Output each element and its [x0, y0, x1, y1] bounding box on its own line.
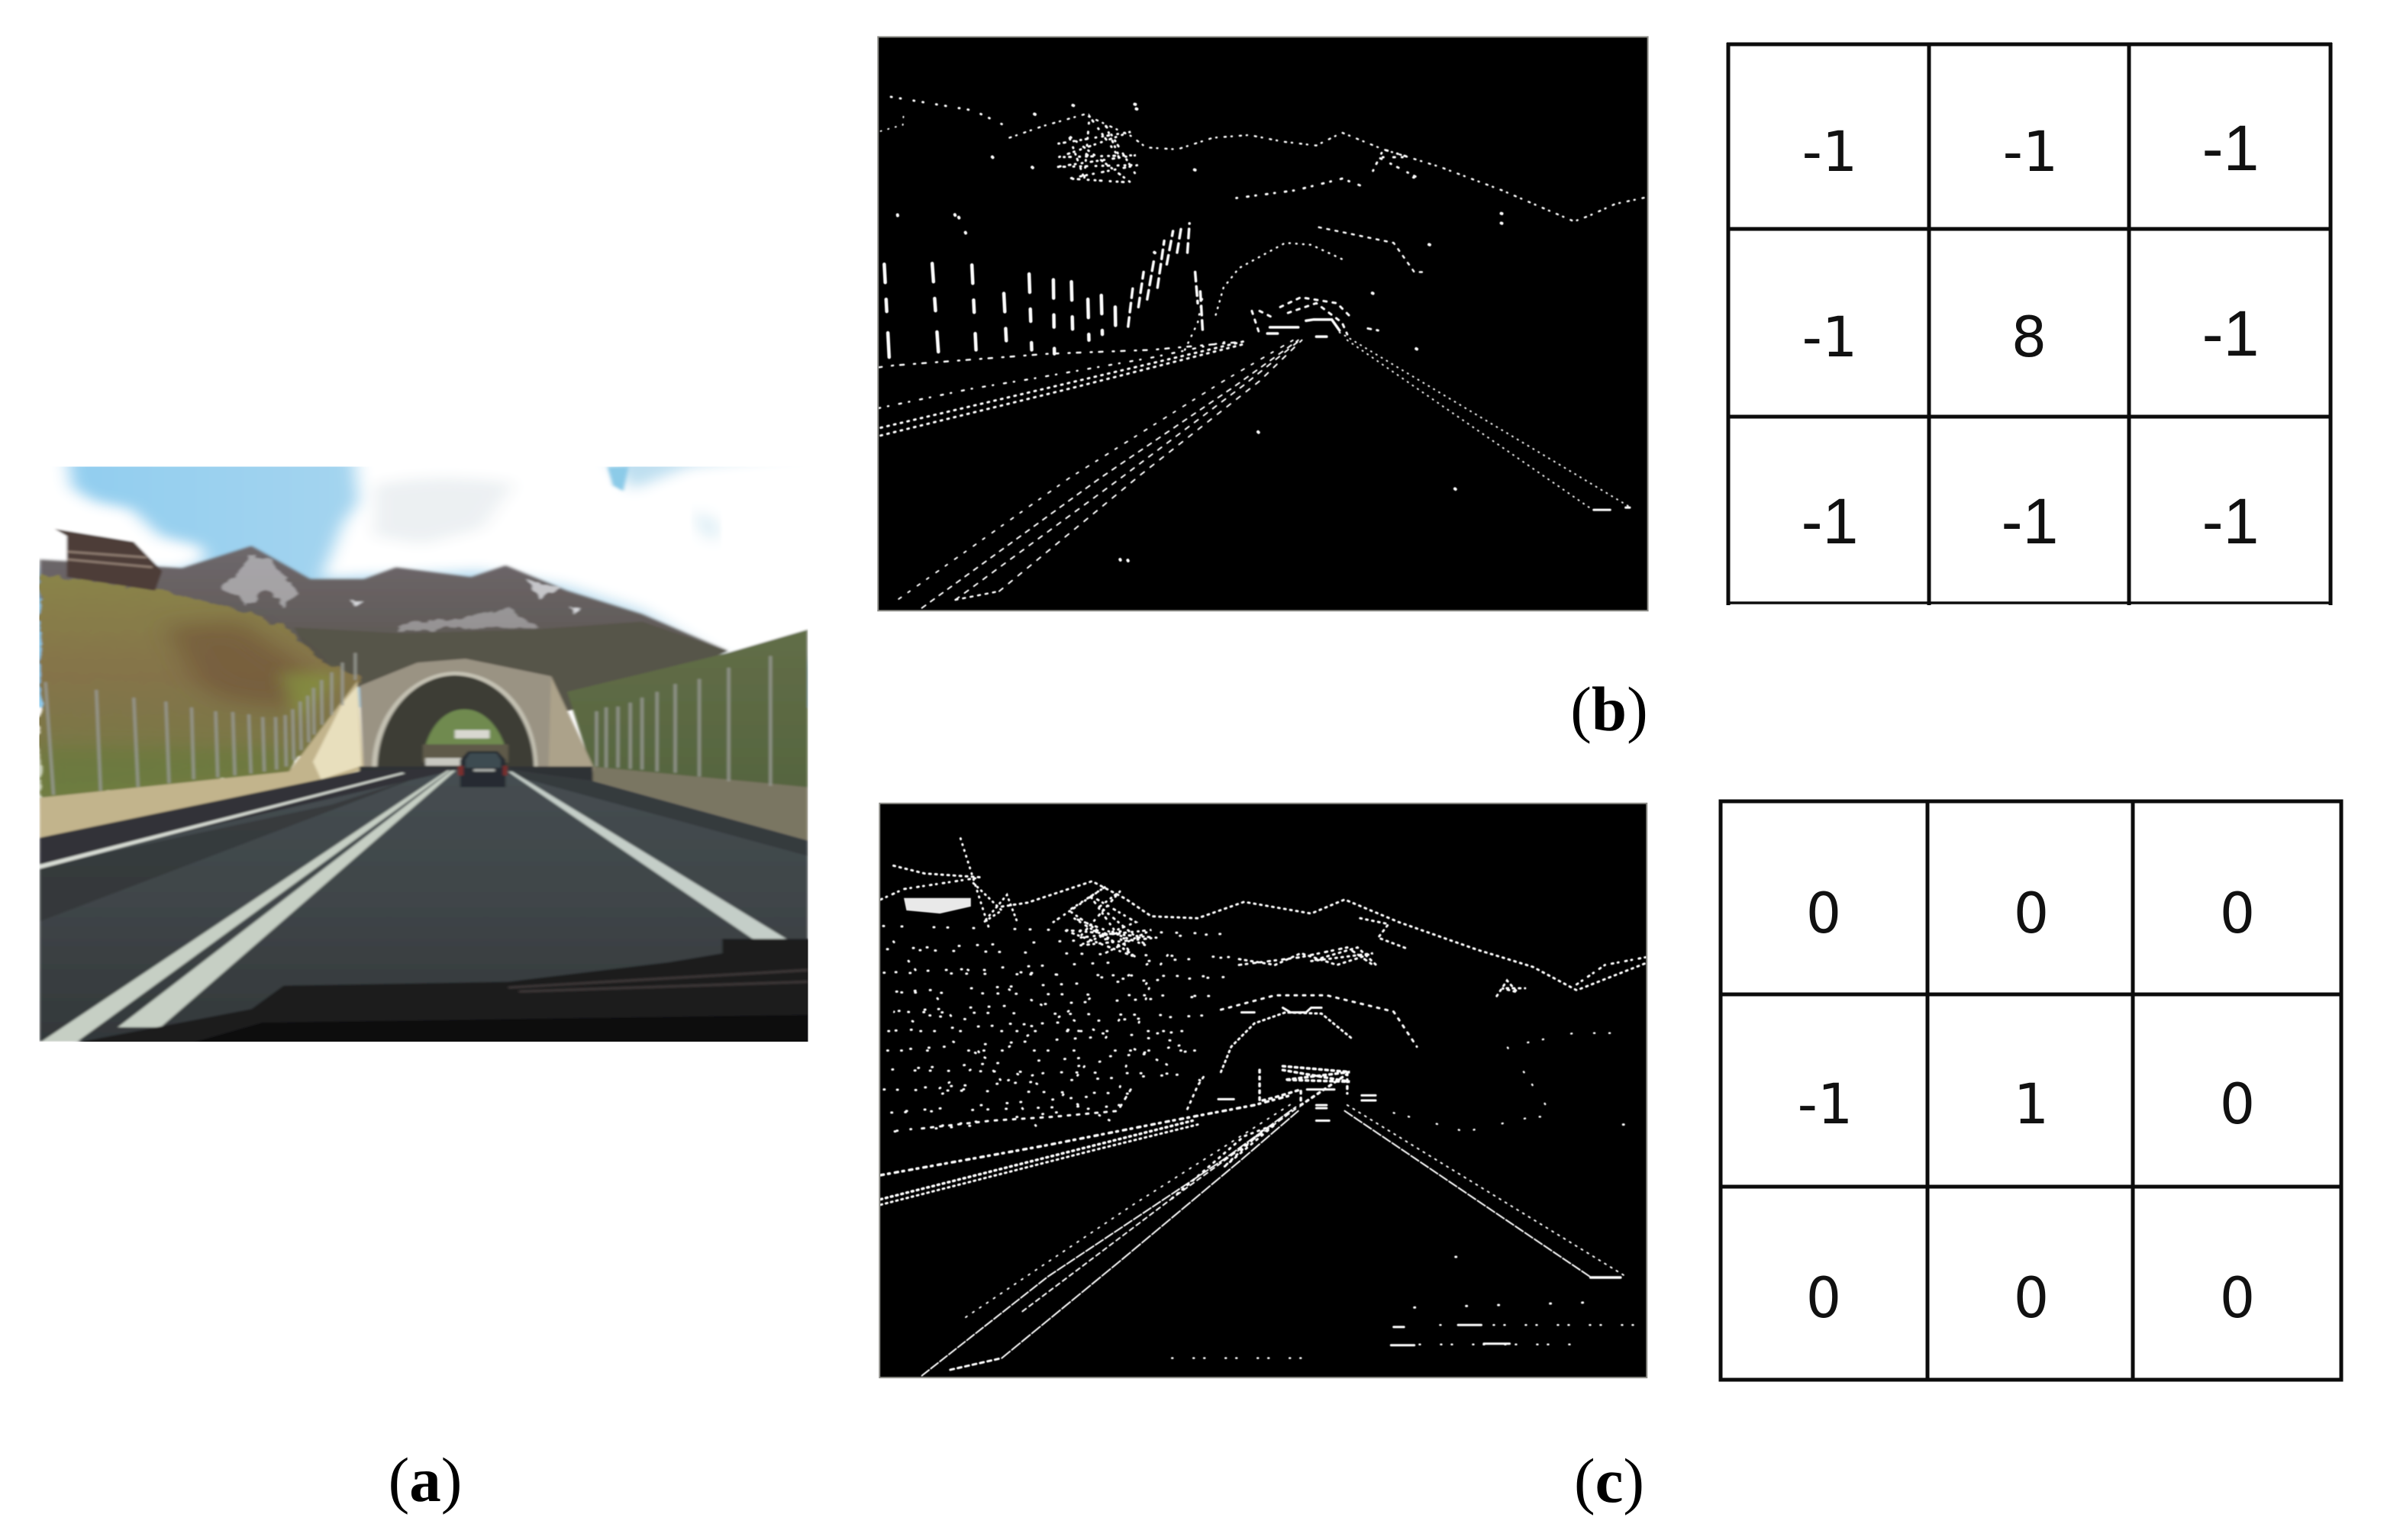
kernel b values: -1 [2202, 298, 2259, 369]
filter kernel c [1721, 801, 2341, 1380]
tunnel exit [424, 708, 505, 746]
sky [27, 458, 818, 707]
far road apron [360, 766, 593, 785]
grey cloud shade [375, 478, 514, 544]
wall base edge [922, 1090, 1131, 1129]
centre line edges [898, 340, 1302, 608]
caption a: (a) [389, 1445, 462, 1515]
hillside speckle [883, 926, 1610, 1132]
black background [878, 37, 1648, 611]
kernel b values: 8 [2011, 305, 2047, 370]
kernel c values: 0 [2220, 881, 2255, 946]
mountains [40, 545, 728, 653]
kernel b values [1802, 112, 2259, 557]
shed [55, 529, 162, 591]
panel c: first-derivative filtered edge image [879, 804, 1647, 1377]
tunnel portal [358, 658, 553, 768]
kernel c values: 0 [1806, 881, 1841, 946]
skyline edges [881, 97, 1647, 221]
kernel c grid [1721, 801, 2341, 1380]
panel a: road photograph [16, 450, 834, 1044]
kernel b values: -1 [2202, 485, 2259, 557]
snow speckle [1056, 116, 1138, 182]
kernel b values: -1 [1802, 305, 1857, 370]
tunnel arch [377, 675, 534, 769]
kernel c values: 0 [2014, 1266, 2049, 1331]
kernel b values: -1 [1802, 485, 1858, 557]
snow patches [219, 556, 580, 631]
kernel c values: 0 [1806, 1266, 1841, 1331]
left verge edges [878, 342, 1239, 367]
kernel c values [1798, 881, 2255, 1331]
clouds [40, 467, 808, 665]
isolated specks [863, 24, 1502, 561]
right hill speckle [1497, 981, 1525, 996]
tunnel arch edges [1216, 243, 1344, 315]
centre line edges [922, 1101, 1298, 1376]
car [460, 752, 505, 787]
right shoulder [505, 768, 808, 856]
right line edges [1347, 1105, 1626, 1277]
road shadow [40, 774, 428, 921]
lower road streaks [1172, 1125, 1647, 1358]
diagonal wall ladder [1128, 224, 1203, 334]
left verge edges [881, 1095, 1291, 1175]
kernel c values: -1 [1798, 1072, 1853, 1137]
blue sky gaps [608, 467, 629, 491]
kernel b values: -1 [1802, 120, 1857, 185]
bright shed block [904, 898, 971, 913]
right hillside [567, 630, 808, 789]
kernel c values: 0 [2220, 1072, 2255, 1137]
skyline edges [881, 839, 1647, 991]
left shoulder [40, 768, 460, 865]
kernel b grid [1727, 43, 2332, 605]
tunnel arch edges [1221, 1013, 1353, 1072]
left retaining wall [40, 681, 364, 838]
road surface [40, 768, 808, 1042]
kernel c values: 1 [2014, 1072, 2049, 1137]
caption b: (b) [1570, 674, 1648, 744]
caption c: (c) [1574, 1445, 1644, 1516]
left edge line [40, 772, 405, 869]
dashboard [69, 939, 811, 1044]
kernel b values: -1 [2002, 485, 2058, 557]
arch rim [372, 672, 537, 769]
right line edges [1340, 333, 1631, 507]
kernel c values: 0 [2014, 881, 2049, 946]
fence post edges [884, 263, 1116, 362]
tunnel centre cluster [1282, 1066, 1350, 1081]
left hillside [40, 575, 359, 799]
double centre lines [42, 771, 450, 1042]
black background [879, 804, 1647, 1377]
kernel b values: -1 [2202, 112, 2259, 184]
right edge line [508, 772, 790, 941]
panel b: Laplacian filtered edge image [863, 24, 1648, 611]
right retaining wall [591, 766, 808, 840]
border [879, 804, 1647, 1377]
snow speckle [1053, 887, 1156, 957]
image border [878, 37, 1648, 611]
kernel c values: 0 [2220, 1266, 2255, 1331]
filter kernel b [1727, 43, 2332, 605]
lower mountain band [294, 622, 727, 715]
ridge speckle [1373, 150, 1419, 179]
fence posts [46, 652, 770, 795]
tunnel centre cluster [1252, 298, 1378, 334]
kernel b values: -1 [2003, 120, 2058, 185]
